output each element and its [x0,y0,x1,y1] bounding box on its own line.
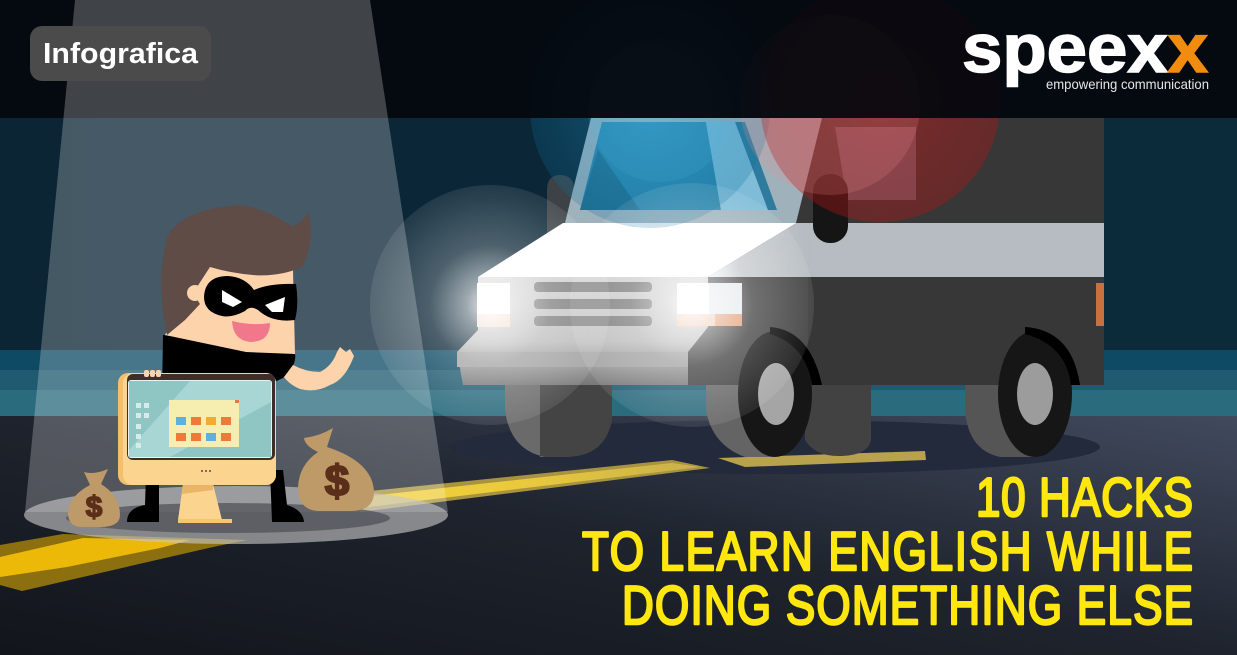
title: DOING SOMETHING ELSE [622,574,1193,636]
far front wheel [805,380,871,456]
front wheel near [706,327,822,457]
logo: speexx: speexx [962,10,1208,87]
title: TO LEARN ENGLISH WHILE [582,520,1193,582]
side marker [1096,283,1104,326]
logo: speexx: empowering communication [1046,76,1209,92]
title [582,466,1193,636]
windshield frame [565,118,822,223]
windshield dark reflection [580,150,640,210]
face [165,262,295,354]
fingers [144,370,161,377]
right headlight glow [570,183,814,427]
left headlight glow [370,185,610,425]
road marking: small stripe under truck [718,451,926,467]
hood side highlight [708,223,810,277]
arm [284,347,354,390]
windshield glass [580,122,721,210]
file window [169,400,239,447]
mask [204,276,297,321]
white body stripe [770,223,1104,277]
small money bag [68,469,120,527]
large money bag [298,428,374,511]
road marking: left yellow stripe [0,534,247,591]
windshield reflection [706,122,778,210]
spotlight pool [24,486,448,544]
eyes [222,290,285,312]
badge: Infografica [30,26,211,81]
windshield pillar [735,122,777,210]
right mirror [813,174,848,243]
bumper line [457,352,688,367]
right headlight [677,283,742,326]
ground [0,416,1237,655]
rear wheel [998,327,1080,457]
police truck [457,118,1104,457]
monitor stand [178,484,232,523]
grille [534,282,652,326]
ear [187,285,203,301]
left front wheel [505,380,612,457]
mouth [232,321,270,342]
spotlight beam [25,0,448,512]
large money bag: $ [325,457,349,506]
robber shadow [66,503,390,533]
side panel under hood [688,277,808,385]
torso [162,335,295,395]
desktop icons [136,403,149,448]
small money bag: $ [86,491,103,524]
rear wheel back [965,380,1035,457]
top dark band [0,0,1237,118]
right leg and shoe [270,470,304,522]
truck body [780,118,1104,385]
door window [835,127,916,200]
road marking: right yellow stripe [360,460,710,512]
robber [118,205,354,523]
truck shadow [450,420,1100,474]
title: 10 HACKS [976,466,1193,528]
blue police light glow [530,0,770,228]
left headlight [477,283,510,327]
background: night sky and horizon bands [0,0,1237,417]
left mirror [547,175,574,233]
monitor [118,373,276,485]
truck front [457,277,708,385]
hood [478,223,796,277]
badge: Infografica: Infografica [43,38,199,70]
left leg and shoe [127,475,159,522]
hair [161,205,311,335]
red police light glow [740,0,1000,222]
